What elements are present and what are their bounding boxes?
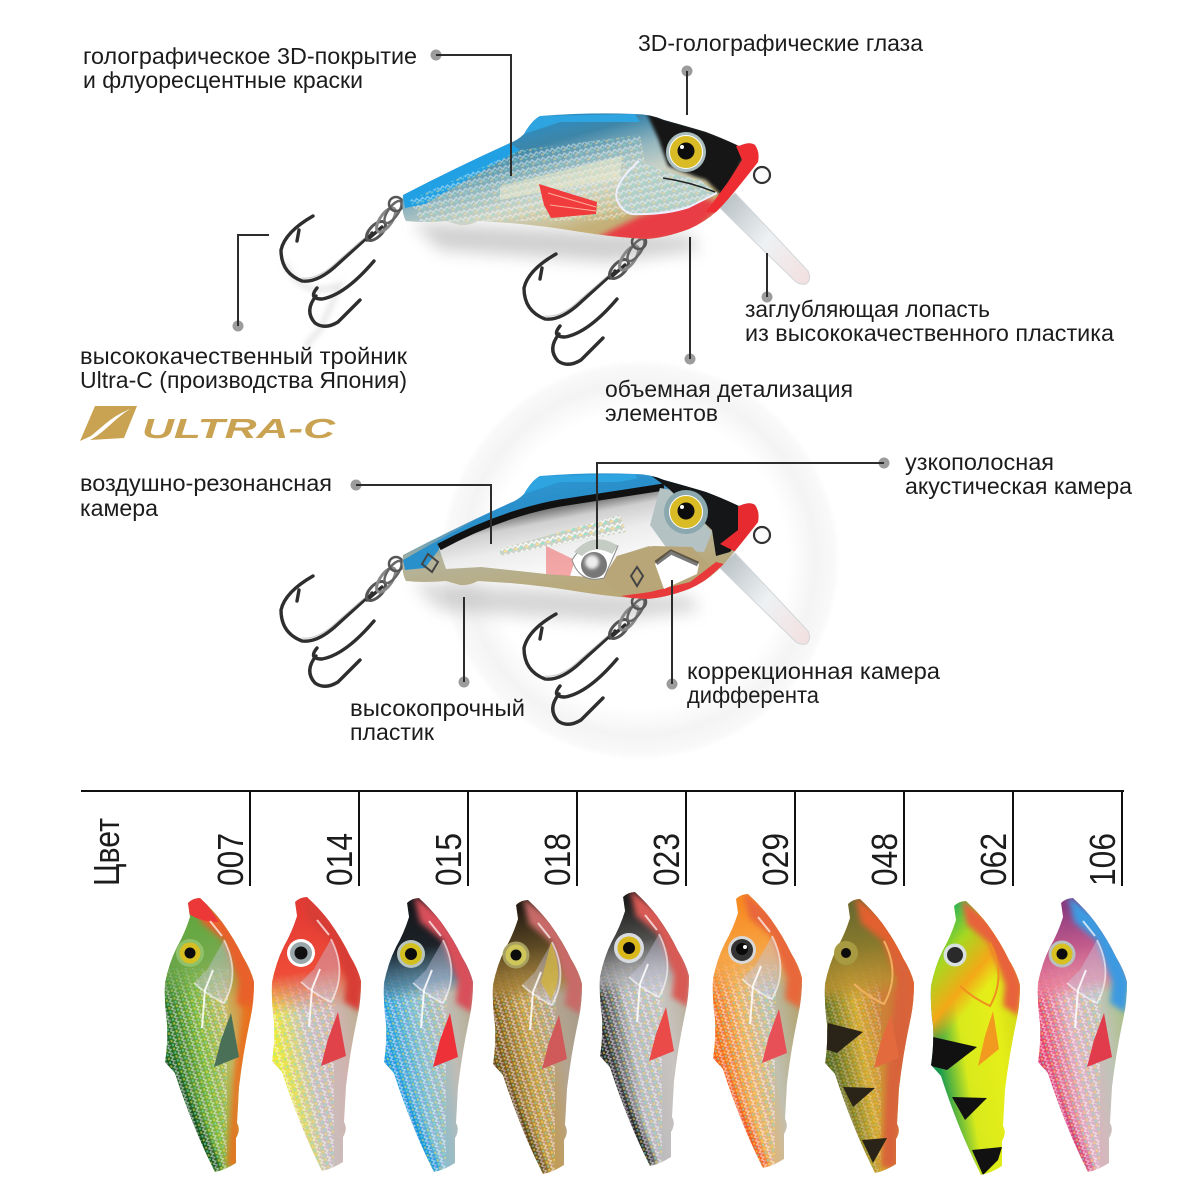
colour table header: 007 <box>210 833 251 886</box>
logo: Ultra-C: ULTRA-C <box>142 413 336 444</box>
pectoral fin <box>539 184 597 218</box>
callout: detail <box>605 237 853 426</box>
cutaway interior <box>439 488 668 578</box>
callout: strong plastic <box>350 597 525 745</box>
callout: treble hook: Ultra-C (производства Япония) <box>80 367 407 393</box>
callout: treble hook <box>80 235 408 393</box>
rhombus screw front <box>631 567 643 586</box>
eye <box>664 490 708 534</box>
logo: Ultra-C <box>80 406 336 444</box>
lure colour 014 <box>272 895 364 1177</box>
callout: holographic eyes <box>638 30 923 115</box>
callout: diving lip: заглубляющая лопасть <box>745 296 990 322</box>
colour table header: 029 <box>755 833 796 886</box>
callout: holographic eyes: 3D-голографические глаза <box>638 30 923 56</box>
callout: holographic coating: и флуоресцентные краски <box>83 67 363 93</box>
callout: strong plastic: высокопрочный <box>350 695 525 721</box>
lure colour 029 <box>713 892 805 1174</box>
rhombus screw rear <box>422 554 438 572</box>
callout: holographic coating <box>83 43 511 176</box>
colour table header <box>81 791 1124 886</box>
top lure: exterior view <box>281 112 810 364</box>
acoustic ball chamber <box>572 539 618 579</box>
colour table header: 023 <box>646 833 687 886</box>
callout: air resonance chamber: воздушно-резонансная <box>80 470 332 496</box>
callout: treble hook: высококачественный тройник <box>80 343 408 369</box>
callout: trim chamber <box>666 580 940 708</box>
callout: air resonance chamber: камера <box>80 495 158 521</box>
callout: air resonance chamber <box>80 470 491 544</box>
colour table header: 014 <box>319 833 360 886</box>
lure colour 062 <box>931 899 1023 1175</box>
lower lure: cutaway view <box>281 472 810 724</box>
callout: strong plastic: пластик <box>350 719 435 745</box>
callout: trim chamber: дифферента <box>687 682 819 708</box>
callout: holographic coating: голографическое 3D-покрытие <box>83 43 417 69</box>
lure colour 018 <box>493 898 585 1180</box>
lure colour 007 <box>165 896 257 1178</box>
callout: trim chamber: коррекционная камера <box>687 658 940 684</box>
line tie ring <box>754 167 770 183</box>
colour table header: 018 <box>537 833 578 886</box>
lure colour 023 <box>600 890 692 1172</box>
callout: acoustic chamber <box>597 449 1132 549</box>
callout: detail: элементов <box>605 400 718 426</box>
eye <box>666 132 706 172</box>
colour table header: 062 <box>973 833 1014 886</box>
colour table header: Цвет <box>86 818 127 886</box>
callout: diving lip <box>745 253 1114 346</box>
callout: diving lip: из высококачественного пластика <box>745 320 1114 346</box>
colour table header: 106 <box>1082 833 1123 886</box>
line tie ring <box>754 527 770 543</box>
callout: acoustic chamber: акустическая камера <box>905 473 1132 499</box>
colour table header: 048 <box>864 833 905 886</box>
colour table header: 015 <box>428 833 469 886</box>
lure colour 106 <box>1038 896 1130 1178</box>
background disc behind lower lure <box>440 360 840 760</box>
callout: detail: объемная детализация <box>605 376 853 402</box>
lure colour 048 <box>825 897 917 1179</box>
callout: acoustic chamber: узкополосная <box>905 449 1054 475</box>
trim chamber <box>655 551 699 589</box>
lure colour 015 <box>384 896 476 1178</box>
